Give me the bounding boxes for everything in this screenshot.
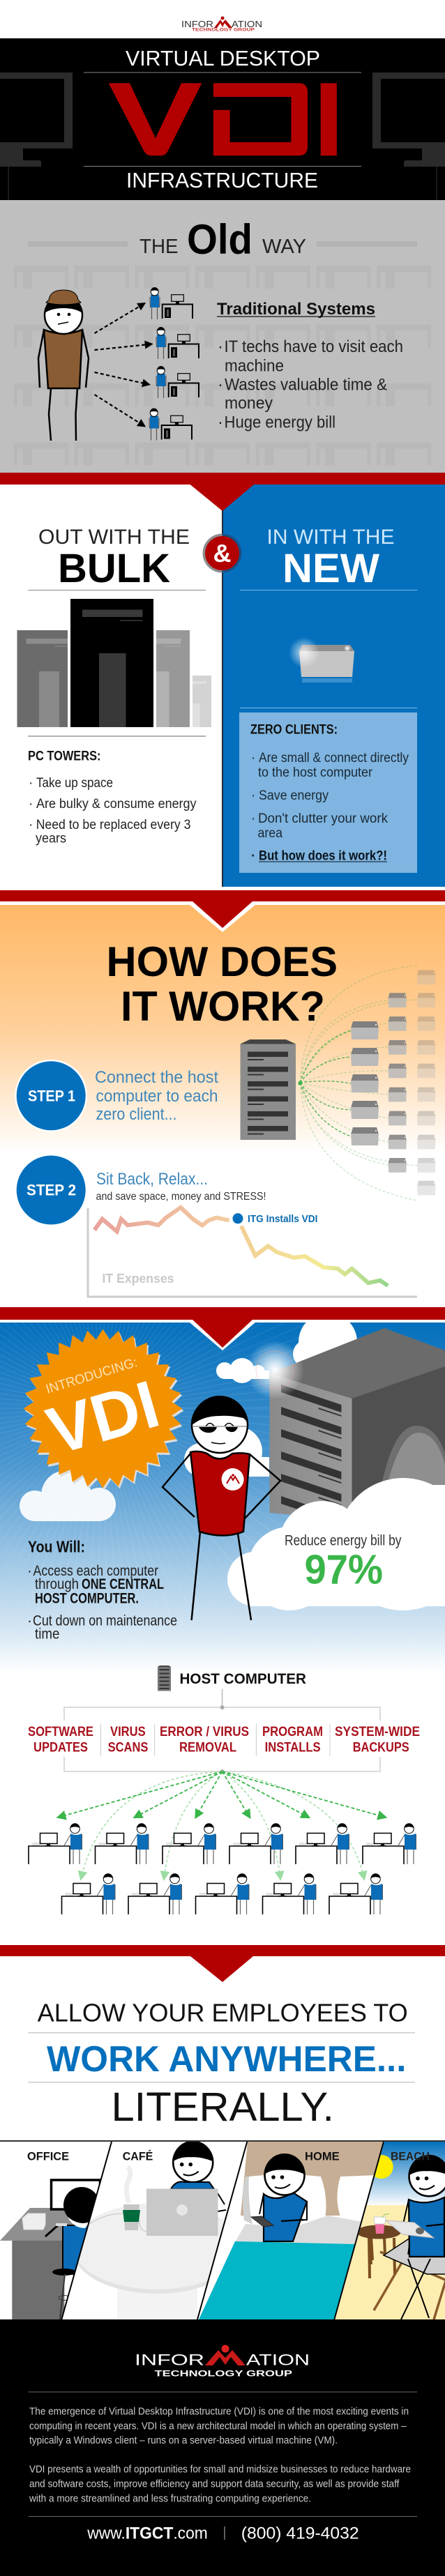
- text: about paragraph 2: VDI presents a wealth of opportunities for small and midsize businesses to reduce hardware: [29, 2464, 411, 2476]
- illustration: hero technician: [163, 1396, 280, 1620]
- callout: zero clients: But how does it work?!: [259, 849, 387, 863]
- text: traditional systems bullets: money: [225, 394, 273, 413]
- heading: VDI logotype: [109, 83, 337, 155]
- callout: zero clients: ZERO CLIENTS:: [250, 722, 338, 738]
- label: home: HOME: [305, 2150, 340, 2163]
- cloud: small: [216, 1358, 269, 1383]
- icons: zero clients near: [351, 1021, 379, 1145]
- text: energy saving callout: Reduce energy bill by: [285, 1532, 402, 1549]
- text: pc towers list: ·: [29, 797, 33, 811]
- text: traditional systems bullets: [218, 337, 403, 432]
- callout: zero clients: ·: [251, 751, 255, 765]
- text: step 2 description: Sit Back, Relax...: [96, 1170, 208, 1189]
- text: pc towers list: ·: [29, 818, 33, 832]
- text: step 1 description: zero client...: [96, 1105, 177, 1124]
- band: fourth red chevron: [0, 1945, 445, 1982]
- text: you will list: through: [35, 1576, 79, 1592]
- badge: introducing vdi: INTRODUCING:: [44, 1355, 139, 1397]
- text: pc towers list: [28, 749, 197, 846]
- icon: zero client: [289, 637, 354, 683]
- icons: zero clients far: [417, 970, 435, 1195]
- panel: beach scene: [335, 2142, 445, 2319]
- icon: ampersand badge: [203, 534, 242, 573]
- cloud: left: [20, 1470, 116, 1521]
- text: step 1 description: Connect the host: [95, 1068, 218, 1087]
- heading: out with the bulk: OUT WITH THE: [38, 526, 190, 549]
- panel: how does it work: [0, 905, 445, 1297]
- panel: the old way: [0, 200, 445, 473]
- top logo: [181, 17, 262, 32]
- text: pc towers list: years: [36, 831, 66, 846]
- panel: out with the bulk: [0, 485, 222, 887]
- diagram: distribution arrows front row: [58, 1771, 386, 1817]
- text: task labels: UPDATES: [33, 1740, 88, 1755]
- text: about paragraph 2: [29, 2464, 411, 2504]
- badge: step 1: [15, 1060, 87, 1132]
- heading: how does it work: [106, 938, 338, 1030]
- heading: the old way: Old: [187, 216, 252, 263]
- panel: footer: [0, 2319, 445, 2576]
- text: step 2 description: and save space, money and STRESS!: [96, 1191, 266, 1203]
- text: about paragraph 1: The emergence of Virtual Desktop Infrastructure (VDI) is one of the most exciting events in: [29, 2405, 409, 2417]
- cloud: behind server: [293, 1323, 357, 1363]
- callout: zero clients: Save energy: [259, 788, 329, 803]
- cloud: behind hero: [184, 1426, 269, 1477]
- text: about paragraph 2: with a more streamlined and less frustrating computing experience.: [29, 2492, 311, 2504]
- icon: ampersand badge: &: [213, 539, 232, 567]
- text: pc towers list: Are bulky & consume energy: [36, 797, 197, 811]
- text: energy saving callout: [285, 1532, 402, 1592]
- text: task labels: VIRUS: [110, 1725, 146, 1739]
- text: task labels: SOFTWARE: [28, 1725, 93, 1739]
- text: website and phone: [86, 2524, 359, 2543]
- heading: the old way: THE: [139, 236, 179, 258]
- text: website and phone: (800) 419-4032: [241, 2524, 359, 2543]
- arrow: to first worker: [95, 303, 145, 333]
- chart: IT expenses: IT Expenses: [102, 1272, 174, 1286]
- arrow: to second worker: [95, 344, 152, 350]
- diagram: brackets: [64, 1689, 380, 1774]
- badge: introducing vdi: [8, 1314, 199, 1505]
- text: pc towers list: ·: [29, 776, 33, 791]
- panel: host computer tasks: [28, 1666, 420, 1914]
- icon: right monitor outline: [372, 73, 445, 200]
- logo: information technology group: INFOR: [135, 2352, 204, 2369]
- icon: worker at desk 2: [156, 327, 199, 359]
- icon: worker at desk 1: [150, 287, 193, 319]
- callout: zero clients: to the host computer: [258, 765, 373, 780]
- text: you will list: time: [35, 1626, 60, 1643]
- text: step 1 description: computer to each: [96, 1087, 218, 1106]
- icons: zero clients middle: [388, 993, 407, 1173]
- text: traditional systems bullets: Huge energy bill: [225, 413, 335, 432]
- panel: office scene: [0, 2179, 100, 2319]
- heading: work anywhere: [28, 1998, 415, 2130]
- illustration: isometric server: [246, 1328, 445, 1524]
- top logo: ATION: [232, 19, 262, 29]
- heading: work anywhere: ALLOW YOUR EMPLOYEES TO: [38, 1998, 408, 2027]
- text: you will list: Access each computer: [33, 1563, 158, 1579]
- text: pc towers list: Need to be replaced every 3: [36, 818, 190, 832]
- text: you will list: You Will:: [28, 1538, 85, 1556]
- heading: how does it work: HOW DOES: [106, 938, 338, 985]
- icon: left monitor outline: [0, 73, 73, 200]
- text: task labels: SYSTEM-WIDE: [335, 1725, 420, 1739]
- text: energy saving callout: 97%: [304, 1546, 383, 1592]
- icon: worker at desk 4: [149, 409, 192, 441]
- icons: front row of workers: [29, 1823, 416, 1864]
- panel: introducing vdi: [0, 1323, 445, 1665]
- icon: host server: [240, 1039, 296, 1140]
- callout: zero clients: [239, 712, 417, 873]
- chart: IT expenses: ITG Installs VDI: [248, 1213, 318, 1225]
- arrow: to fourth worker: [95, 395, 145, 426]
- panel: cafe scene: [78, 2142, 226, 2319]
- text: task labels: SCANS: [108, 1740, 148, 1755]
- text: website and phone: www.ITGCT.com: [86, 2524, 208, 2543]
- icon: host computer: [158, 1666, 171, 1691]
- heading: out with the bulk: [38, 526, 190, 591]
- label: cafe: CAFÉ: [123, 2150, 153, 2163]
- text: pc towers list: PC TOWERS:: [28, 749, 100, 764]
- text: traditional systems bullets: ·: [218, 413, 223, 432]
- logo: information technology group: [135, 2345, 310, 2378]
- callout: zero clients: area: [258, 826, 282, 841]
- heading: how does it work: IT WORK?: [121, 983, 325, 1030]
- logo: information technology group: ATION: [246, 2352, 310, 2369]
- text: about paragraph 1: typically a Windows client – runs on a server-based virtual machine (VM).: [29, 2434, 338, 2446]
- scene dividers: [0, 2141, 445, 2319]
- label: office: OFFICE: [27, 2150, 69, 2163]
- text: about paragraph 2: and software costs, improve efficiency and support data security, as well as provide staff: [29, 2478, 400, 2490]
- panel: header: [0, 38, 445, 200]
- text: you will list: ONE CENTRAL: [82, 1576, 164, 1592]
- callout: zero clients: Don't clutter your work: [258, 811, 388, 826]
- text: you will list: HOST COMPUTER.: [35, 1591, 139, 1606]
- text: step 1 description: [95, 1068, 218, 1124]
- diagram: distribution arrows back row: [81, 1771, 364, 1879]
- text: you will list: Cut down on maintenance: [33, 1613, 177, 1629]
- text: traditional systems bullets: ·: [218, 337, 223, 356]
- heading: infrastructure: INFRASTRUCTURE: [126, 168, 318, 192]
- illustration: pc towers: [17, 599, 211, 727]
- band: third red chevron: [0, 1307, 445, 1350]
- text: about paragraph 1: [29, 2405, 409, 2446]
- callout: zero clients: ·: [251, 788, 255, 803]
- top logo: INFOR: [181, 19, 213, 29]
- top logo: TECHNOLOGY GROUP: [192, 28, 255, 32]
- text: traditional systems bullets: ·: [218, 375, 223, 395]
- text: task labels: BACKUPS: [353, 1740, 409, 1755]
- heading: virtual desktop: VIRTUAL DESKTOP: [126, 46, 320, 70]
- band: second red chevron: [0, 890, 445, 932]
- text: task labels: PROGRAM: [262, 1725, 323, 1739]
- chart: IT expenses: [88, 1207, 417, 1297]
- badge: introducing vdi: VDI: [39, 1366, 167, 1469]
- text: you will list: ·: [27, 1613, 32, 1629]
- label: beach: BEACH: [391, 2150, 430, 2163]
- text: about paragraph 1: computing in recent years. VDI is a new architectural model in which an operating system –: [29, 2420, 407, 2432]
- icons: back row of workers: [61, 1873, 382, 1914]
- diagram: connection lines: [300, 966, 417, 1201]
- text: you will list: [27, 1538, 177, 1643]
- text: task labels: REMOVAL: [179, 1740, 236, 1755]
- panel: in with the new: [222, 485, 445, 887]
- text: traditional systems bullets: machine: [225, 357, 284, 375]
- text: task labels: INSTALLS: [265, 1740, 321, 1755]
- badge: step 1: STEP 1: [28, 1088, 75, 1104]
- text: traditional systems bullets: Wastes valuable time &: [225, 375, 387, 395]
- cloud: energy bill: [227, 1478, 445, 1610]
- text: traditional systems bullets: IT techs have to visit each: [225, 337, 403, 356]
- panel: home scene: [198, 2142, 384, 2319]
- illustration: technician: [38, 290, 89, 441]
- band: first red chevron: [0, 473, 445, 511]
- text: step 2 description: [96, 1170, 266, 1203]
- badge: step 2: [15, 1154, 87, 1226]
- callout: zero clients: Are small & connect directly: [259, 751, 409, 765]
- heading: in with the new: NEW: [282, 546, 379, 591]
- heading: in with the new: IN WITH THE: [266, 526, 395, 549]
- text: task labels: ERROR / VIRUS: [160, 1725, 249, 1739]
- icon: worker at desk 3: [156, 366, 199, 398]
- heading: work anywhere: WORK ANYWHERE...: [47, 2039, 406, 2080]
- heading: the old way: WAY: [262, 236, 306, 258]
- text: task labels: [28, 1725, 420, 1755]
- heading: traditional systems: Traditional Systems: [217, 300, 375, 319]
- heading: host computer: HOST COMPUTER: [180, 1671, 306, 1687]
- heading: work anywhere: LITERALLY.: [112, 2085, 334, 2130]
- text: you will list: ·: [27, 1563, 32, 1579]
- callout: zero clients: ·: [251, 811, 255, 826]
- heading: out with the bulk: BULK: [58, 546, 170, 591]
- logo: information technology group: TECHNOLOGY GROUP: [155, 2370, 292, 2378]
- callout: zero clients: ·: [251, 849, 255, 863]
- text: pc towers list: Take up space: [36, 776, 113, 791]
- badge: step 2: STEP 2: [27, 1181, 76, 1199]
- heading: in with the new: [266, 526, 395, 591]
- arrow: to third worker: [95, 372, 149, 385]
- heading: the old way: [139, 216, 306, 263]
